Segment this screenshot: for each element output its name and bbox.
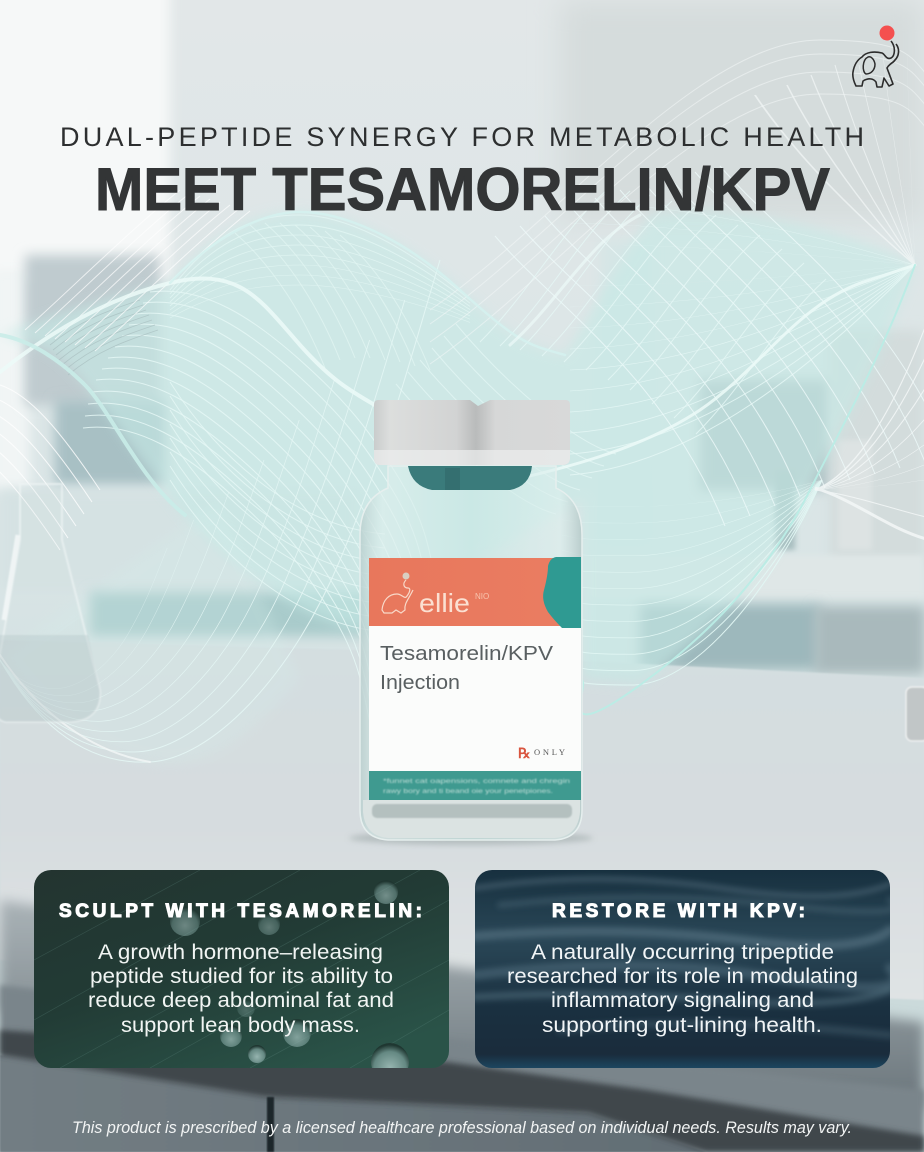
panel heading: RESTORE WITH KPV: [552,901,805,922]
label: white panel [369,626,581,772]
label: ellie wordmark: ellie [419,588,470,618]
molecular wave mesh [0,40,924,762]
main title: MEET TESAMORELIN/KPV [95,156,830,223]
label: NIO mark: NIO [475,592,489,601]
label: teal accent [543,557,581,628]
panel body text: peptide studied for its ability to [90,964,393,988]
panel body text: support lean body mass. [121,1013,360,1037]
glass base [363,800,580,838]
teal wave glow [0,211,915,764]
water ripple texture [475,879,895,1035]
vial [349,400,593,845]
panel body text: supporting gut-lining health. [542,1013,822,1037]
glass flask, left [0,484,100,722]
panel body text: researched for its role in modulating [507,964,858,988]
panel body text: reduce deep abdominal fat and [88,988,394,1012]
label: product name: Tesamorelin/KPV [380,643,554,665]
panel: restore with kpv [475,870,895,1068]
leaf texture and droplets [34,870,449,1081]
subtitle: DUAL-PEPTIDE SYNERGY FOR METABOLIC HEALTH [60,122,864,152]
vial shadow [349,831,593,845]
label: Rx only: ONLY [534,747,565,757]
label: Rx only [518,745,565,761]
label: footer fine print [383,778,570,795]
label: teal footer band [369,771,581,800]
panel: sculpt with tesamorelin [34,870,449,1081]
teal stopper [408,466,532,490]
label: orange header [369,558,581,626]
metal cap [374,400,570,465]
wave ridge highlights [0,212,915,762]
label: injection: Injection [380,672,460,694]
disclaimer: This product is prescribed by a licensed healthcare professional based on individual needs. Results may vary. [72,1119,852,1137]
panel body text: A naturally occurring tripeptide [531,940,834,964]
panel body text [507,940,858,1037]
bench surface and cabinets [0,640,924,1152]
panel body text: A growth hormone–releasing [98,940,383,964]
label: footer fine print: rawy bory and ti beand oie your penetpiones. [383,788,553,795]
object at right edge of bench [906,687,924,741]
panel body text: inflammatory signaling and [551,988,814,1012]
label: footer fine print: *funnet cat oapensions, comnete and chregin [383,778,570,785]
label: logo icon [382,572,413,613]
brand icon: elephant with red balloon [853,26,899,87]
panel heading: SCULPT WITH TESAMORELIN: [59,901,422,922]
vial glass body [360,466,582,840]
label: Rx only: ℞ [518,745,531,761]
panel body text [88,940,394,1037]
